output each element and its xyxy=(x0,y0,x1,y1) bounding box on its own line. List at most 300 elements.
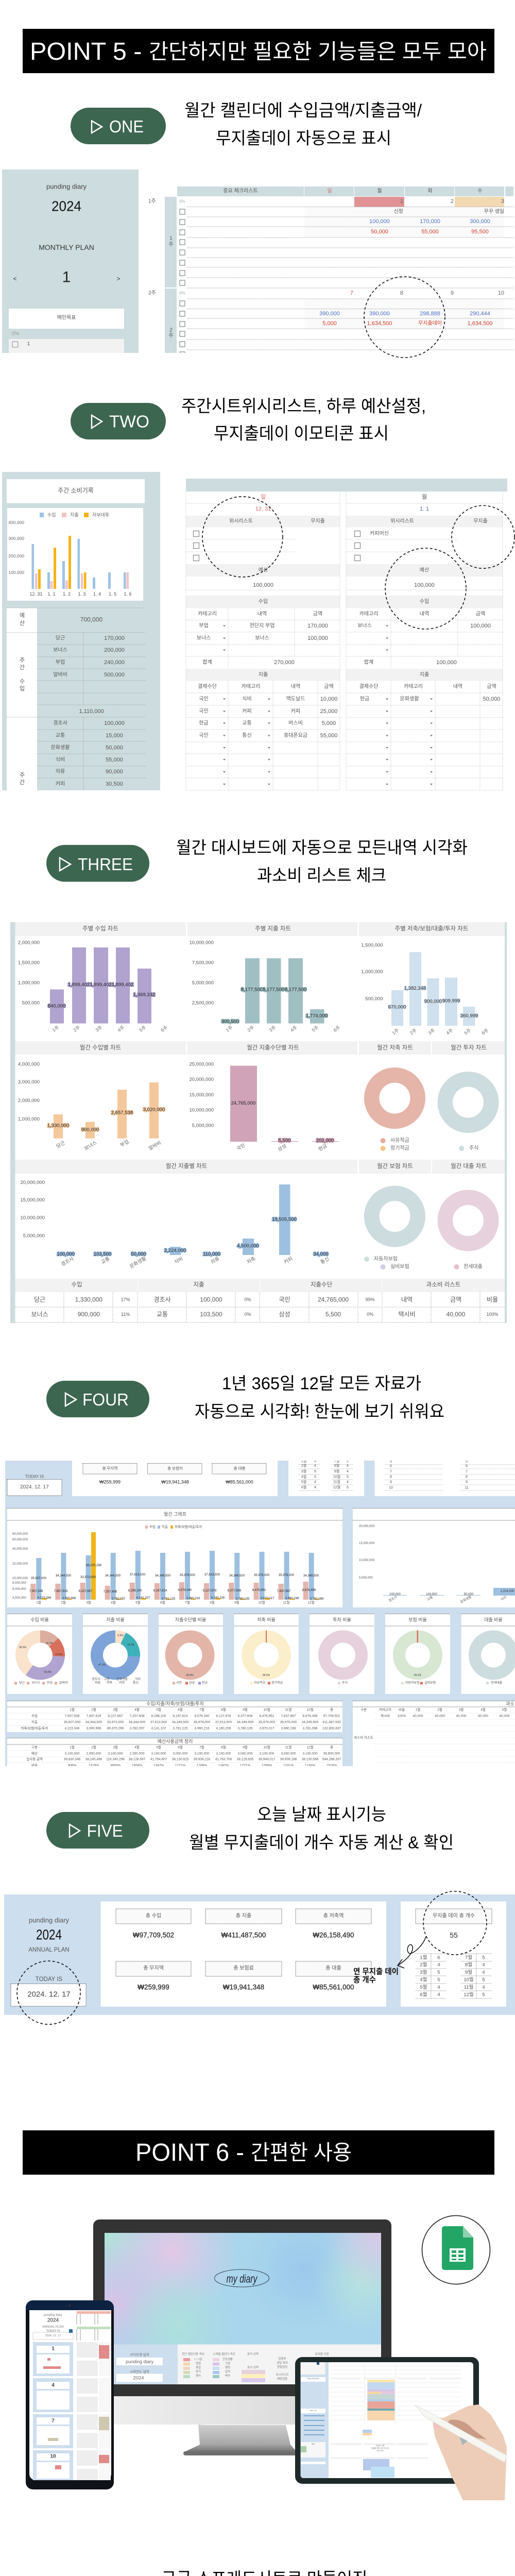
chart: insurance donut: 실비보험 xyxy=(390,1263,409,1269)
panel: weekly daily sheet: 100,000 xyxy=(470,623,491,629)
no-spend total: 4 xyxy=(482,1985,485,1990)
table: budget usage: 1347% xyxy=(218,1764,229,1767)
table: overspending list: 4월 xyxy=(480,1707,486,1711)
totals grid: ₩259,999 xyxy=(138,1984,169,1991)
text: three description: 과소비 리스트 체크 xyxy=(257,866,386,885)
no-spend total: 9월 xyxy=(465,1969,472,1975)
chart: insurance donut xyxy=(364,1193,418,1269)
no-spend total: 5 xyxy=(482,1992,485,1998)
table: budget usage: 2,300,000 xyxy=(130,1752,145,1756)
panel: weekly daily sheet: 보너스 xyxy=(197,635,211,641)
chart: category graph: 식비 xyxy=(500,1595,507,1602)
hand with stylus xyxy=(415,2404,507,2500)
chart: monthly graph: 수입 xyxy=(149,1525,156,1529)
panel: monthly calendar sheet: 100,000 xyxy=(369,218,390,225)
phone: 2024. 12. 17 xyxy=(45,2334,61,2337)
table: monthly summary: 5,500 xyxy=(325,1311,341,1318)
chart: weekly spending bars: 200,000 xyxy=(8,553,24,558)
chart: category graph: 100,000 xyxy=(389,1593,401,1596)
donut: income share: 당근 xyxy=(19,1681,25,1685)
panel: monthly calendar sheet: 1,634,500 xyxy=(468,320,492,327)
monitor: 업적 xyxy=(225,2369,230,2374)
panel: weekly daily sheet: 현금 xyxy=(199,720,209,726)
chart: spending by payment method xyxy=(189,1061,339,1153)
table: annual income and spending: 5월 xyxy=(156,1707,161,1711)
chart: weekly spending: 3주 xyxy=(268,1025,277,1033)
table: weekly income and expense: 의류 xyxy=(56,769,65,775)
annual plan sidebar: 2024 xyxy=(36,1927,62,1942)
table: monthly summary: 국민 xyxy=(279,1296,290,1303)
panel: weekly daily sheet: 식비 xyxy=(242,696,252,702)
table: overspending list: 비율 xyxy=(399,1707,405,1711)
chart: weekly spending: 1주 xyxy=(225,1025,233,1033)
chart: loan donut: 전세대출 xyxy=(464,1263,483,1269)
number list table: 11 xyxy=(465,1486,469,1490)
phone: TODAY IS xyxy=(46,2330,60,2333)
panel: monthly calendar sheet: 1 xyxy=(400,198,403,205)
chart: income by type: 2,657,538 xyxy=(111,1110,133,1116)
chart: spending by category: 의류 xyxy=(210,1256,221,1265)
chart: category graph: 103,500 xyxy=(426,1593,438,1596)
table: budget usage: 예산사용금액 정리 xyxy=(158,1738,193,1744)
table: budget usage: 3,100,000 xyxy=(151,1752,166,1756)
chart: spending by payment method: 국민 xyxy=(236,1143,246,1152)
badge: two: TWO xyxy=(109,412,149,431)
tablet: 메모 xyxy=(312,2443,315,2445)
table: annual income and spending xyxy=(7,1701,342,1732)
donut: savings share xyxy=(248,1630,285,1685)
panel: monthly calendar sheet: 390,000 xyxy=(319,311,340,317)
table: annual income and spending: 35,979,000 xyxy=(194,1721,211,1724)
panel: monthly calendar sheet: 170,000 xyxy=(420,218,440,225)
totals grid: 총 지출 xyxy=(236,1912,251,1919)
chart: income by type: 보너스 xyxy=(83,1140,98,1151)
chart: spending by category: 19,505,500 xyxy=(272,1217,297,1222)
phone: 7 xyxy=(52,2418,55,2424)
panel: weekly daily sheet: 보너스 xyxy=(255,635,269,641)
table: weekly income and expense: 50,000 xyxy=(106,745,123,751)
table: budget usage: 12월 xyxy=(306,1744,314,1750)
table: annual income and spending: 7,907,538 xyxy=(65,1715,80,1718)
tablet: 건강 체크 xyxy=(376,2449,384,2452)
calendar header row: 수 xyxy=(477,188,483,194)
donut: loan share xyxy=(475,1636,512,1685)
panel: monthly calendar sheet xyxy=(139,187,515,361)
monitor: 시작연도 입력 xyxy=(130,2369,149,2374)
no-spend total: 55 xyxy=(450,1931,458,1939)
table: weekly income and expense: 커피 xyxy=(56,781,65,787)
table: budget usage: 1289% xyxy=(262,1764,272,1767)
panel: weekly daily sheet: 100,000 xyxy=(307,635,328,641)
panel: monthly plan sidebar: 1 xyxy=(27,341,30,346)
panel: weekly daily sheet: 휴대폰요금 xyxy=(284,733,307,739)
callout: yearly no-spend total note: 총 개수 xyxy=(353,1975,376,1985)
chart: weekly spending: 300,500 xyxy=(221,1019,239,1024)
chart: spending by payment method: 현금 xyxy=(318,1143,329,1153)
table: overspending list: 과소비 리스트 xyxy=(354,1735,373,1739)
monitor: punding diary xyxy=(126,2359,154,2364)
chart: weekly income: 5주 xyxy=(139,1025,147,1033)
table: budget usage: 39,830,346 xyxy=(64,1758,81,1761)
chart: weekly spending bars: 12. 31 xyxy=(29,591,43,597)
monitor: 사이트명 입력 xyxy=(130,2352,149,2357)
table: overspending list: 2월 xyxy=(437,1707,442,1711)
chart: insurance donut: 자동차보험 xyxy=(374,1256,398,1262)
panel: weekly daily sheet: 170,000 xyxy=(307,623,328,629)
totals grid: ₩97,709,502 xyxy=(133,1931,174,1939)
table: budget usage: 1347% xyxy=(153,1764,164,1767)
panel: monthly calendar sheet: 8 xyxy=(400,290,403,296)
table: annual income and spending: 7,807,619 xyxy=(87,1715,101,1718)
no-spend total: 6 xyxy=(437,1955,440,1961)
table: monthly summary: 1,330,000 xyxy=(75,1296,102,1303)
phone: 10 xyxy=(50,2453,56,2460)
chart: weekly spending: 5,000,000 xyxy=(192,980,214,986)
chart: monthly graph: 8,377,608 xyxy=(228,1589,242,1592)
chart: category graph: 2,224,000 xyxy=(501,1590,514,1593)
no-spend total: 5 xyxy=(482,1977,485,1982)
chart: category graph: 교통 xyxy=(426,1595,434,1602)
panel: monthly calendar sheet: 95,500 xyxy=(471,229,489,235)
table: monthly summary: 0% xyxy=(244,1312,251,1317)
donut: income share xyxy=(14,1636,68,1685)
text: five description: 월별 무지출데이 개수 자동 계산 & 확인 xyxy=(189,1833,454,1852)
donut: payment method share: 국민 xyxy=(176,1681,182,1685)
totals cards: ₩85,561,000 xyxy=(226,1480,253,1485)
table: weekly income and expense: 문화생활 xyxy=(51,744,70,751)
table: monthly summary: 24,765,000 xyxy=(318,1296,349,1303)
chart: monthly graph: 34,349,500 xyxy=(155,1574,171,1578)
panel: monthly calendar sheet: 1,634,500 xyxy=(367,320,392,327)
table: annual income and spending: 8,127,678 xyxy=(216,1715,231,1718)
monitor: 휴일 xyxy=(196,2365,201,2369)
panel: monthly calendar sheet: 0% xyxy=(179,199,185,204)
chart: spending by payment method: 삼성 xyxy=(277,1143,287,1153)
table: weekly income and expense: 간 xyxy=(20,779,25,786)
table: overspending list xyxy=(353,1701,515,1766)
panel: monthly calendar sheet: 390,000 xyxy=(369,311,390,317)
chart: weekly income: 500,000 xyxy=(22,1001,40,1006)
panel: monthly calendar sheet: 55,000 xyxy=(421,229,439,235)
panel: weekly daily sheet: 커피머신 xyxy=(370,531,389,537)
donut: savings share: 99.5% xyxy=(263,1674,270,1677)
panel: monthly dashboard: 과소비 리스트 xyxy=(426,1281,460,1288)
no-spend total: 12월 xyxy=(464,1992,474,1998)
table: budget usage: 1331% xyxy=(283,1764,294,1767)
no-spend count table: 2월 xyxy=(301,1463,306,1468)
panel: weekly daily sheet: 버스비 xyxy=(288,720,303,726)
table: annual income and spending: 35,979,000 xyxy=(280,1721,297,1724)
panel: monthly plan sidebar: 0% xyxy=(12,331,20,337)
panel: monthly calendar sheet: 7 xyxy=(350,290,353,296)
calendar header row xyxy=(177,187,513,196)
table: annual income and spending: 411,487,500 xyxy=(322,1721,341,1724)
text: four description: 1년 365일 12달 모든 자료가 xyxy=(222,1374,421,1393)
chart: monthly graph: 2월 xyxy=(61,1600,66,1604)
totals grid: ₩26,158,490 xyxy=(313,1931,354,1939)
chart: weekly savings: 1,000,000 xyxy=(361,969,383,975)
badge: five: FIVE xyxy=(87,1821,123,1840)
no-spend count table: 12월 xyxy=(333,1485,340,1489)
table: overspending list: 택시비 xyxy=(381,1714,390,1718)
chart: loan donut xyxy=(445,1197,491,1269)
chart: spending by category: 20,000,000 xyxy=(20,1180,45,1185)
no-spend total: 8월 xyxy=(465,1962,472,1968)
monitor: 행정 xyxy=(225,2365,230,2369)
chart: monthly graph: 7,207,608 xyxy=(104,1590,117,1594)
chart: spending by category: 34,000 xyxy=(313,1251,329,1257)
tablet: 내일을 위한 체크 리스트 xyxy=(371,2447,389,2449)
panel: weekly daily sheet: 내역 xyxy=(258,611,267,617)
chart: weekly savings: 1,382,348 xyxy=(404,986,426,991)
table: overspending list: 40,000 xyxy=(435,1715,445,1718)
table: budget usage: 구분 xyxy=(31,1745,38,1750)
chart: spending by category: 4,500,000 xyxy=(237,1243,259,1249)
chart: category graph: 5,000,000 xyxy=(359,1577,373,1580)
panel: weekly daily sheet: 금액 xyxy=(487,683,496,689)
panel: weekly daily sheet: 무지출 xyxy=(311,518,325,524)
chart: weekly spending bars: 100,000 xyxy=(8,570,24,575)
chart: category graph: 15,000,000 xyxy=(359,1542,375,1545)
chart: monthly graph: 34,349,500 xyxy=(303,1574,319,1578)
monitor: 표지 선택 xyxy=(247,2365,259,2369)
chart: weekly income: 1,369,332 xyxy=(133,992,155,997)
chart: weekly spending bars: 1. 1 xyxy=(47,591,56,597)
table: budget usage: 1271% xyxy=(240,1764,250,1767)
table: annual income and spending: 12월 xyxy=(306,1707,314,1711)
chart: spending by payment method: 10,000,000 xyxy=(189,1108,214,1113)
no-spend count table xyxy=(288,1459,364,1496)
badge: three: THREE xyxy=(78,855,133,874)
chart: monthly graph: 37,613,500 xyxy=(204,1573,220,1577)
table: overspending list: 1월 xyxy=(416,1707,420,1711)
table: budget usage: 10월 xyxy=(263,1744,270,1750)
chart: monthly graph: 5월 xyxy=(135,1600,141,1604)
chart: income by type: 알바비 xyxy=(148,1140,162,1151)
table: annual income and spending: 7,207,608 xyxy=(130,1715,145,1718)
table: monthly summary: 99% xyxy=(366,1297,375,1302)
chart: spending by category: 100,000 xyxy=(57,1251,75,1257)
chart: monthly graph: 3,960,198 xyxy=(285,1597,299,1600)
table: budget usage: 39,939,216 xyxy=(194,1758,211,1761)
totals cards: 총 대출 xyxy=(234,1465,245,1470)
table: monthly summary: 103,500 xyxy=(200,1311,222,1318)
panel: weekly daily sheet: 커피 xyxy=(242,708,252,714)
donut cards row xyxy=(7,1614,515,1694)
chart: income by type: 4,000,000 xyxy=(18,1061,40,1067)
table: budget usage: 3,100,000 xyxy=(303,1752,318,1756)
no-spend count table: 3월 xyxy=(301,1469,306,1473)
no-spend count table: 6월 xyxy=(301,1485,306,1489)
donut: insurance share: 99.2% xyxy=(414,1674,422,1677)
panel: weekly daily sheet: 위시리스트 xyxy=(229,517,253,524)
table: budget usage: 6월 xyxy=(178,1744,183,1750)
chart: spending by category: 103,500 xyxy=(94,1251,111,1257)
text: two description: 무지출데이 이모티콘 표시 xyxy=(214,423,389,443)
no-spend count table: 4 xyxy=(314,1481,316,1484)
table: overspending list: 5월 xyxy=(502,1707,507,1711)
totals cards: 총 보험비 xyxy=(167,1466,183,1470)
chart: monthly graph: 35,979,000 xyxy=(180,1574,196,1577)
chart: monthly graph: 8,676,496 xyxy=(302,1589,316,1592)
table: monthly summary: 100% xyxy=(486,1312,499,1317)
panel: weekly daily sheet: 내역 xyxy=(453,683,462,689)
panel: monthly dashboard: 월간 지출별 차트 xyxy=(166,1163,207,1170)
panel: weekly daily sheet: 금액 xyxy=(476,611,485,617)
no-spend count table: 5 xyxy=(314,1476,316,1479)
chart: income by type: 1,330,000 xyxy=(47,1123,69,1128)
panel: weekly daily sheet: 수입 xyxy=(420,598,429,605)
table: budget usage: 38,126,597 xyxy=(129,1758,146,1761)
my diary logo: my diary xyxy=(227,2272,258,2285)
panel: weekly daily sheet: 결제수단 xyxy=(198,683,217,689)
table: weekly income and expense: 90,000 xyxy=(106,769,123,775)
chart: income by type: 1,000,000 xyxy=(18,1116,40,1122)
table: monthly summary xyxy=(15,1292,505,1323)
no-spend total: 3월 xyxy=(420,1969,427,1975)
text: four description: 자동으로 시각화! 한눈에 보기 쉬워요 xyxy=(195,1402,444,1421)
chart: weekly savings: 670,000 xyxy=(388,1005,406,1010)
number list table: 6 xyxy=(390,1464,392,1468)
table: overspending list: 100% xyxy=(398,1715,406,1718)
table: weekly income and expense: 입 xyxy=(20,685,25,692)
donut: insurance share: 실비보험 xyxy=(424,1681,436,1685)
no-spend count table: 5 xyxy=(314,1460,316,1463)
no-spend total: 10월 xyxy=(464,1976,474,1982)
chart: monthly graph: 40,000,000 xyxy=(12,1548,28,1551)
table: budget usage: 9월 xyxy=(243,1744,248,1750)
panel: weekly daily sheet: 지출 xyxy=(259,672,268,678)
panel: weekly daily sheet: 결제수단 xyxy=(359,683,378,689)
panel: weekly daily sheet: 내역 xyxy=(420,611,429,617)
no-spend total: 무지출 데이 총 개수 xyxy=(433,1912,475,1919)
annual plan sidebar xyxy=(11,1917,86,2006)
no-spend count table: 2 xyxy=(347,1460,349,1463)
chart: weekly income: 1,000,000 xyxy=(18,980,40,986)
donut: spending share: 저축 xyxy=(107,1681,113,1685)
donut: investment share xyxy=(324,1636,362,1685)
chart: weekly savings: 909,999 xyxy=(442,998,460,1004)
panel: weekly daily sheet: 보너스 xyxy=(357,622,372,629)
table: monthly summary: 당근 xyxy=(34,1296,45,1303)
chart: weekly income: 1,899,402 xyxy=(90,982,112,988)
table: annual income and spending: 3,960,216 xyxy=(195,1727,210,1730)
monitor: 유의할 사항 xyxy=(315,2352,329,2356)
table: annual income and spending: 3월 xyxy=(113,1707,118,1711)
chart: spending by category: 커피 xyxy=(283,1256,294,1265)
chart: weekly income: 4주 xyxy=(117,1025,125,1033)
totals grid: 총 저축액 xyxy=(323,1912,344,1919)
donut: payment method share: 99.9% xyxy=(186,1674,194,1677)
panel: monthly calendar sheet: 주 xyxy=(168,333,174,339)
chart: weekly spending: 5주 xyxy=(311,1025,319,1033)
table: budget usage: 4월 xyxy=(134,1744,140,1750)
phone: 1 xyxy=(52,2346,55,2351)
donut: savings share: 정기적금 xyxy=(271,1681,283,1685)
no-spend count table: 5월 xyxy=(301,1480,306,1484)
chart: income by type: 부업 xyxy=(119,1139,130,1148)
donut: spending share: 15.3% xyxy=(127,1643,135,1647)
panel: weekly daily sheet: 국민 xyxy=(199,733,209,739)
chart: spending by payment method: 5,500 xyxy=(279,1138,290,1144)
badge: four xyxy=(46,1381,149,1417)
text: three description: 월간 대시보드에 자동으로 모든내역 시각화 xyxy=(176,838,468,857)
panel: monthly plan sidebar: 1 xyxy=(62,269,71,285)
chart: spending by category: 110,000 xyxy=(203,1251,220,1257)
panel: monthly calendar sheet: 0% xyxy=(179,291,185,296)
no-spend total: 7월 xyxy=(465,1955,472,1961)
no-spend count table: 1월 xyxy=(301,1459,306,1463)
donut: spending share xyxy=(92,1634,141,1685)
table: weekly income and expense: 1,110,000 xyxy=(79,708,104,715)
table: budget usage: 38,130,625 xyxy=(172,1758,189,1761)
chart: monthly graph: 7,907,538 xyxy=(29,1590,43,1593)
chart: monthly graph: 8,227,667 xyxy=(79,1590,93,1593)
chart: spending by payment method: 5,000,000 xyxy=(192,1123,214,1128)
donut: income share: 13.6% xyxy=(55,1653,63,1656)
table: budget usage: 1288% xyxy=(197,1764,207,1767)
donut cards row: 투자 비율 xyxy=(333,1617,351,1622)
no-spend count table: 9월 xyxy=(334,1469,339,1473)
chart: monthly graph: 1월 xyxy=(36,1600,41,1604)
table: monthly summary: 내역 xyxy=(401,1296,413,1303)
chart: monthly graph: 3,960,216 xyxy=(186,1597,200,1600)
chart: monthly graph: 34,344,500 xyxy=(105,1574,121,1578)
table: annual income and spending: 37,613,500 xyxy=(150,1721,167,1724)
table: annual income and spending: 34,344,500 xyxy=(129,1721,146,1724)
chart: spending by payment method: 202,000 xyxy=(316,1138,334,1144)
no-spend count table: 4 xyxy=(314,1486,316,1489)
chart: spending by category: 교통 xyxy=(100,1256,111,1265)
no-spend total: 5 xyxy=(437,1970,440,1975)
table: budget usage: 41,754,607 xyxy=(150,1758,167,1761)
chart: monthly graph: 80,000,000 xyxy=(12,1533,28,1536)
panel: weekly daily sheet: 금액 xyxy=(324,683,334,689)
monitor: 2024 xyxy=(133,2375,144,2381)
panel: monthly plan sidebar: 메인목표 xyxy=(57,314,76,320)
chart: weekly spending: 7,500,000 xyxy=(192,960,214,965)
dashed circle: no-spend day highlight xyxy=(364,277,445,358)
chart: category graph xyxy=(353,1508,515,1607)
chart: income by type: 3,020,000 xyxy=(143,1107,165,1113)
no-spend total: 5 xyxy=(482,1955,485,1961)
table: annual income and spending: 34,349,500 xyxy=(302,1721,319,1724)
chart: weekly spending bars xyxy=(7,508,143,601)
number list table: 9 xyxy=(466,1481,468,1484)
table: budget usage: 1319% xyxy=(89,1764,99,1767)
text: one description: 월간 캘린더에 수입금액/지출금액/ xyxy=(184,101,422,120)
table: monthly summary: 경조사 xyxy=(153,1296,171,1303)
chart: monthly graph: 6,000,000 xyxy=(12,1588,26,1591)
today box xyxy=(7,1475,62,1496)
chart: weekly spending bars: 1. 6 xyxy=(124,591,132,597)
no-spend total xyxy=(401,1902,506,2007)
chart: weekly spending: 1,774,000 xyxy=(306,1013,328,1019)
table: monthly summary: 교통 xyxy=(157,1311,168,1318)
panel: weekly daily sheet xyxy=(186,479,507,790)
table: budget usage: 3,100,000 xyxy=(216,1752,231,1756)
text: five description: 오늘 날짜 표시기능 xyxy=(257,1805,386,1824)
text: two description xyxy=(181,397,426,443)
no-spend total: 5월 xyxy=(420,1984,427,1990)
chart: monthly graph: 8,197,624 xyxy=(153,1589,167,1592)
chart: monthly graph: 3,970,017 xyxy=(261,1597,274,1600)
table: annual income and spending: 3,960,198 xyxy=(281,1727,296,1730)
chart: weekly savings: 2주 xyxy=(409,1028,418,1036)
no-spend count table: 5 xyxy=(347,1476,349,1479)
table: annual income and spending: 4,141,107 xyxy=(151,1727,166,1730)
table: budget usage: 2,900,000 xyxy=(87,1752,101,1756)
